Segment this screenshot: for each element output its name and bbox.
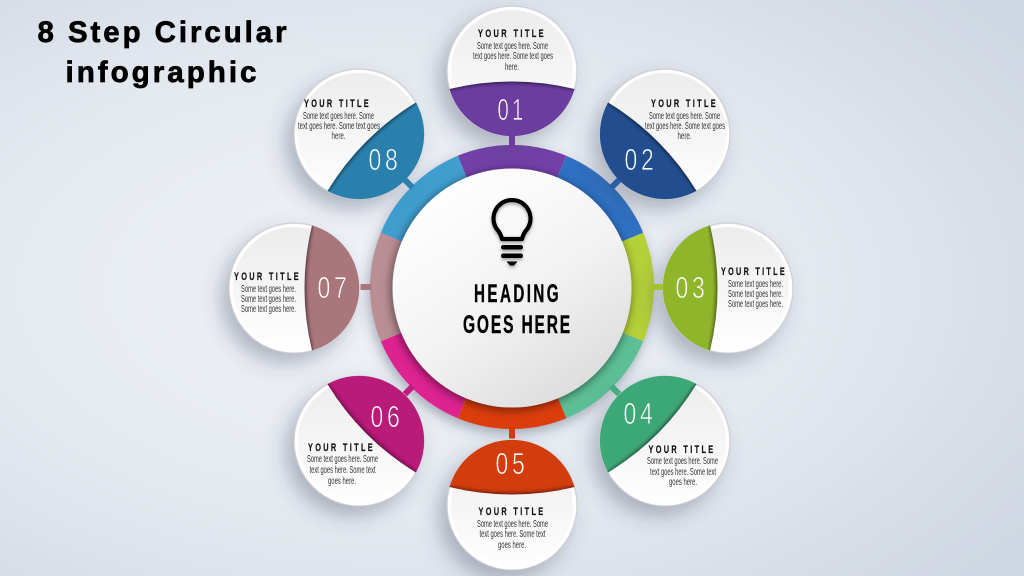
heading (463, 280, 572, 339)
icon: light bulb (494, 200, 530, 266)
step 7: Some text goes here. (241, 283, 296, 295)
step 8: text goes here. Some text goes (298, 120, 380, 132)
step 7: YOUR TITLE (234, 271, 301, 283)
segmented ring (370, 145, 654, 429)
step 6: Some text goes here. Some (307, 453, 378, 465)
step 5: text goes here. Some text (480, 528, 546, 540)
step 4: text goes here. Some text (650, 466, 716, 478)
step 1: text goes here. Some text goes (473, 50, 553, 62)
step 7: Some text goes here. (241, 303, 296, 315)
step 8 (294, 69, 452, 227)
step 4: Some text goes here. Some (647, 455, 718, 467)
step 1: YOUR TITLE (478, 28, 546, 40)
connectors between ring and step circles (360, 136, 664, 438)
step 5: 05 (496, 446, 528, 481)
step 8: 08 (368, 142, 402, 177)
step 5: Some text goes here. Some (477, 518, 548, 530)
step 5: goes here. (498, 539, 526, 551)
step 8: here. (332, 130, 346, 142)
step 1 (446, 6, 578, 136)
step 2: 02 (624, 142, 658, 177)
step 4: 04 (624, 396, 656, 431)
step 5: YOUR TITLE (478, 506, 546, 518)
step 2: YOUR TITLE (651, 98, 718, 110)
step 5 (446, 440, 578, 570)
step 2: here. (678, 130, 692, 142)
step 3: 03 (676, 270, 708, 305)
step 2: text goes here. Some text goes (645, 120, 725, 132)
step 7: Some text goes here. (241, 293, 296, 305)
step 1: Some text goes here. Some (477, 40, 548, 52)
step 1: 01 (498, 92, 526, 127)
step 3: Some text goes here. (728, 298, 783, 310)
step 6 (294, 348, 452, 506)
title: 8 Step Circular (38, 16, 290, 49)
step 2: Some text goes here. Some (649, 110, 720, 122)
step 4: YOUR TITLE (648, 444, 716, 456)
step 3: YOUR TITLE (721, 266, 787, 278)
step 3 (663, 222, 793, 354)
heading: GOES HERE (463, 311, 572, 339)
step 7 (229, 222, 359, 354)
step 4: goes here. (669, 476, 697, 488)
step 6: YOUR TITLE (308, 442, 375, 454)
step 8: Some text goes here. Some (303, 110, 374, 122)
step 6: goes here. (328, 475, 356, 487)
title: infographic (66, 56, 260, 89)
step 6: 06 (370, 399, 404, 434)
heading: HEADING (474, 280, 561, 308)
step 8: YOUR TITLE (304, 98, 371, 110)
title (38, 16, 290, 89)
centre hub circle (392, 168, 632, 408)
step 4 (572, 348, 730, 506)
step 2 (572, 69, 730, 227)
step 1: here. (505, 61, 519, 73)
step 6: text goes here. Some text (310, 464, 376, 476)
step 3: Some text goes here. (728, 288, 783, 300)
step 7: 07 (318, 270, 350, 305)
step 3: Some text goes here. (728, 278, 783, 290)
